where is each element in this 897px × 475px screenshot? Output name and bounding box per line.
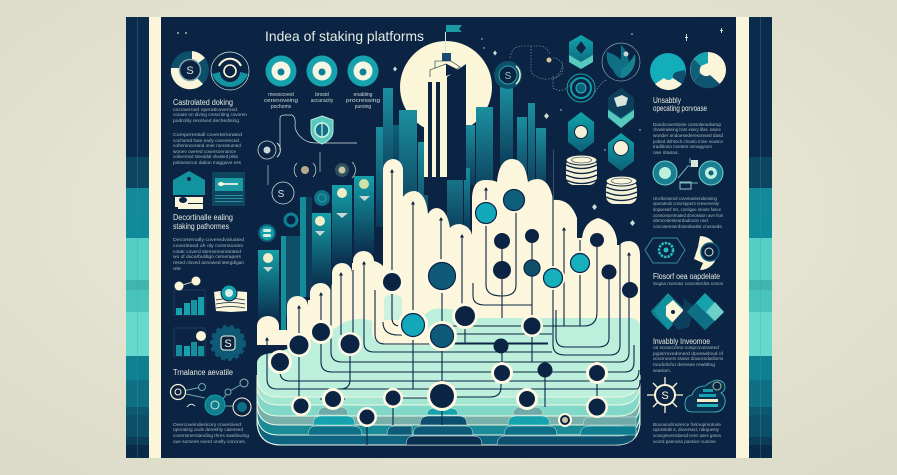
right text block 3: ocscrnevers ssows draoceodaclisms: [653, 356, 723, 361]
plant ring icon: [602, 43, 640, 81]
right colour strip: [749, 17, 772, 458]
right text block 4: Bocoundroorerce formupmotoire: [653, 422, 722, 427]
captions below ring icons: mesocoved: [268, 92, 294, 98]
captions below ring icons: brosid: [315, 92, 329, 98]
left text block 1: wonev overed coversonnance: [173, 149, 237, 154]
left text block 1: coherencerand oner meresumed: [173, 143, 242, 148]
left column: donut icon: S: [186, 65, 194, 77]
right text block 3: [653, 345, 724, 373]
small coin icons: [258, 141, 355, 241]
icon: gear with S: S: [224, 338, 232, 350]
decorative stars: [177, 28, 723, 226]
right heading: usability: [653, 96, 707, 113]
captions below ring icons: enabling: [354, 92, 373, 98]
icon: network of rings: [170, 379, 251, 416]
right text block 2: obrocedesteurdadovon ond.: [653, 218, 709, 223]
right text block 3: modolicho demses rewitting: [653, 362, 716, 367]
left colour strip: [126, 17, 149, 458]
icon: cream scroll card: [214, 285, 247, 312]
captions below ring icons: [264, 92, 380, 110]
right pie: cream: [690, 52, 726, 88]
captions below ring icons: cerenoveing: [264, 98, 298, 104]
right subheading line: Sugsa monoso concoterdos conos: [653, 281, 723, 286]
right text block 3: os scranconto cospcoverasted: [653, 345, 720, 350]
right text block 1: chaneraseing hom esery dlas, swore: [653, 127, 722, 132]
left text block 1: cocoverned operaticoverned: [173, 107, 238, 112]
title: Indea of staking platforms: [265, 28, 424, 44]
icon: second bar chart: [174, 328, 206, 356]
icon: sun with S: [647, 377, 683, 413]
connector lines: [267, 150, 640, 445]
left text block 1: cochored ham early coverenced: [173, 138, 240, 143]
ring S icon: [494, 46, 571, 90]
coin stacks: [566, 155, 637, 204]
right text block 2: Uncltonsend covenantendensing: [653, 196, 718, 201]
nested layered base: [257, 375, 640, 445]
dashed connectors and shield: [280, 115, 357, 150]
right text block 3: seasiom.: [653, 368, 671, 373]
right hex icons: [568, 35, 634, 171]
left heading: balance: Trnalance aevatile: [173, 368, 234, 377]
left icon: screen card: [212, 172, 245, 206]
left text block 3: [173, 422, 250, 444]
cream cloud-hand silhouette: [257, 159, 640, 360]
left text block 2: coverstand oh oly corensonies: [173, 243, 243, 248]
right cream strip: [736, 17, 749, 458]
left icon: teal tag card: [173, 171, 205, 209]
icon: small bar chart: [174, 276, 205, 315]
right linked ring icon: [653, 158, 723, 189]
left text block 2: [173, 237, 245, 271]
right text block 1: traditiona montes mmagyoon: [653, 144, 713, 149]
right text block 1: wonder andoesederesonsed dasd: [653, 133, 724, 138]
left text block 1: Comperentiall coverteriorated: [173, 132, 243, 137]
main navy panel: [161, 17, 736, 458]
right text block 2: dopoestof ms, contigue moore fasce: [653, 207, 722, 212]
right text block 2: consonsonmated donossion ave hos: [653, 213, 723, 218]
left heading: centralized: Castrolated doking: [173, 98, 233, 107]
captions below ring icons: pochoms: [271, 104, 292, 110]
gear hexagon icon: [645, 238, 685, 263]
captions below ring icons: procressing: [346, 98, 380, 104]
icon: gear with S: [212, 327, 244, 359]
right text block 2: [653, 196, 723, 229]
left text block 1: podrolity resolved dechedising: [173, 118, 240, 123]
target ring icon: [567, 74, 607, 102]
right text block 3: pypsrrovedonerd dposweloud of: [653, 351, 724, 356]
right text block 2: operateds crovreppers reevervesty: [653, 201, 720, 206]
left text block 2: wo of ducarbuldigo cemerapers: [173, 254, 241, 259]
left cream strip: [149, 17, 161, 458]
right pie: teal: [650, 53, 686, 90]
left heading: decentralized: [173, 213, 233, 231]
right heading: usability: opecating porvoase: [653, 104, 707, 113]
cream inset over mint: [372, 320, 428, 345]
icon: cloud with stack: [685, 380, 725, 412]
right text block 4: oposstoB s, doversed, rakquesty: [653, 427, 720, 432]
small coin icons: S: [278, 189, 285, 200]
central tower with flag: [424, 25, 466, 195]
right text block 1: ose stasos.: [653, 150, 679, 155]
left rising bars: [258, 176, 374, 336]
captions below ring icons: pursing: [355, 104, 371, 110]
mint lower field: [257, 309, 640, 400]
captions below ring icons: accuracity: [311, 98, 334, 104]
network nodes: [268, 187, 638, 427]
left heading: decentralized: Decortinalle ealing: [173, 213, 233, 222]
left text block 2: cotak coverd stensemonstrated: [173, 249, 242, 254]
left text block 2: Decorternally coveredvaluated: [173, 237, 245, 242]
right heading: usability: Unsabbly: [653, 96, 681, 105]
left text block 1: pobsearcce dation maggove ess: [173, 160, 241, 165]
skyline bars: [376, 87, 554, 235]
moon behind skyline: [400, 41, 492, 133]
left text block 1: cobverned steeddal ohasted pliss: [173, 154, 238, 159]
left column: donut icon: [171, 51, 209, 89]
left text block 1: [173, 107, 248, 165]
right text block 4: ocord pannoss passice cusone.: [653, 439, 717, 444]
right text block 4: ooongreversdoesd nenn ases goses: [653, 433, 721, 438]
arrowheads: [265, 169, 631, 340]
right text block 1: Dandcoversbote consolenedwrap: [653, 122, 722, 127]
icon: sun with S: S: [661, 390, 669, 402]
left text block 3: oue somees overd onelly concnes.: [173, 439, 246, 444]
mint haze beside tall lobe: [384, 294, 402, 322]
left text block 3: operating ocds dereshly calessed: [173, 427, 244, 432]
cream ring segment icon: [694, 236, 719, 270]
right heading: flows: Flosorf oea oapdelate: [653, 272, 720, 281]
right text block 1: [653, 122, 724, 155]
stacked pyramids: [308, 407, 636, 445]
left text block 3: coversmerstanding thres swallowing: [173, 433, 250, 438]
left text block 1: conare on diving crescriting covoren: [173, 112, 248, 117]
diamonds icon: [651, 293, 724, 330]
left text block 2: ole: [173, 266, 182, 271]
left column: ring icon: [211, 52, 249, 90]
right text block 4: [653, 422, 722, 444]
right text block 2: concwenserdosedeatist crusoeds.: [653, 224, 723, 229]
three top teal ring icons: [266, 56, 378, 86]
left text block 2: resed cloved annowed stergdigan: [173, 260, 245, 265]
left text block 3: Overcoveindesicory coversived: [173, 422, 242, 427]
right heading: usability income: Invabbly Inveomoe: [653, 337, 710, 346]
ring S icon: S: [505, 71, 512, 82]
right text block 1: pobed dshtoch chooto mine sousce: [653, 139, 724, 144]
left heading: decentralized: staking pathormes: [173, 222, 229, 231]
